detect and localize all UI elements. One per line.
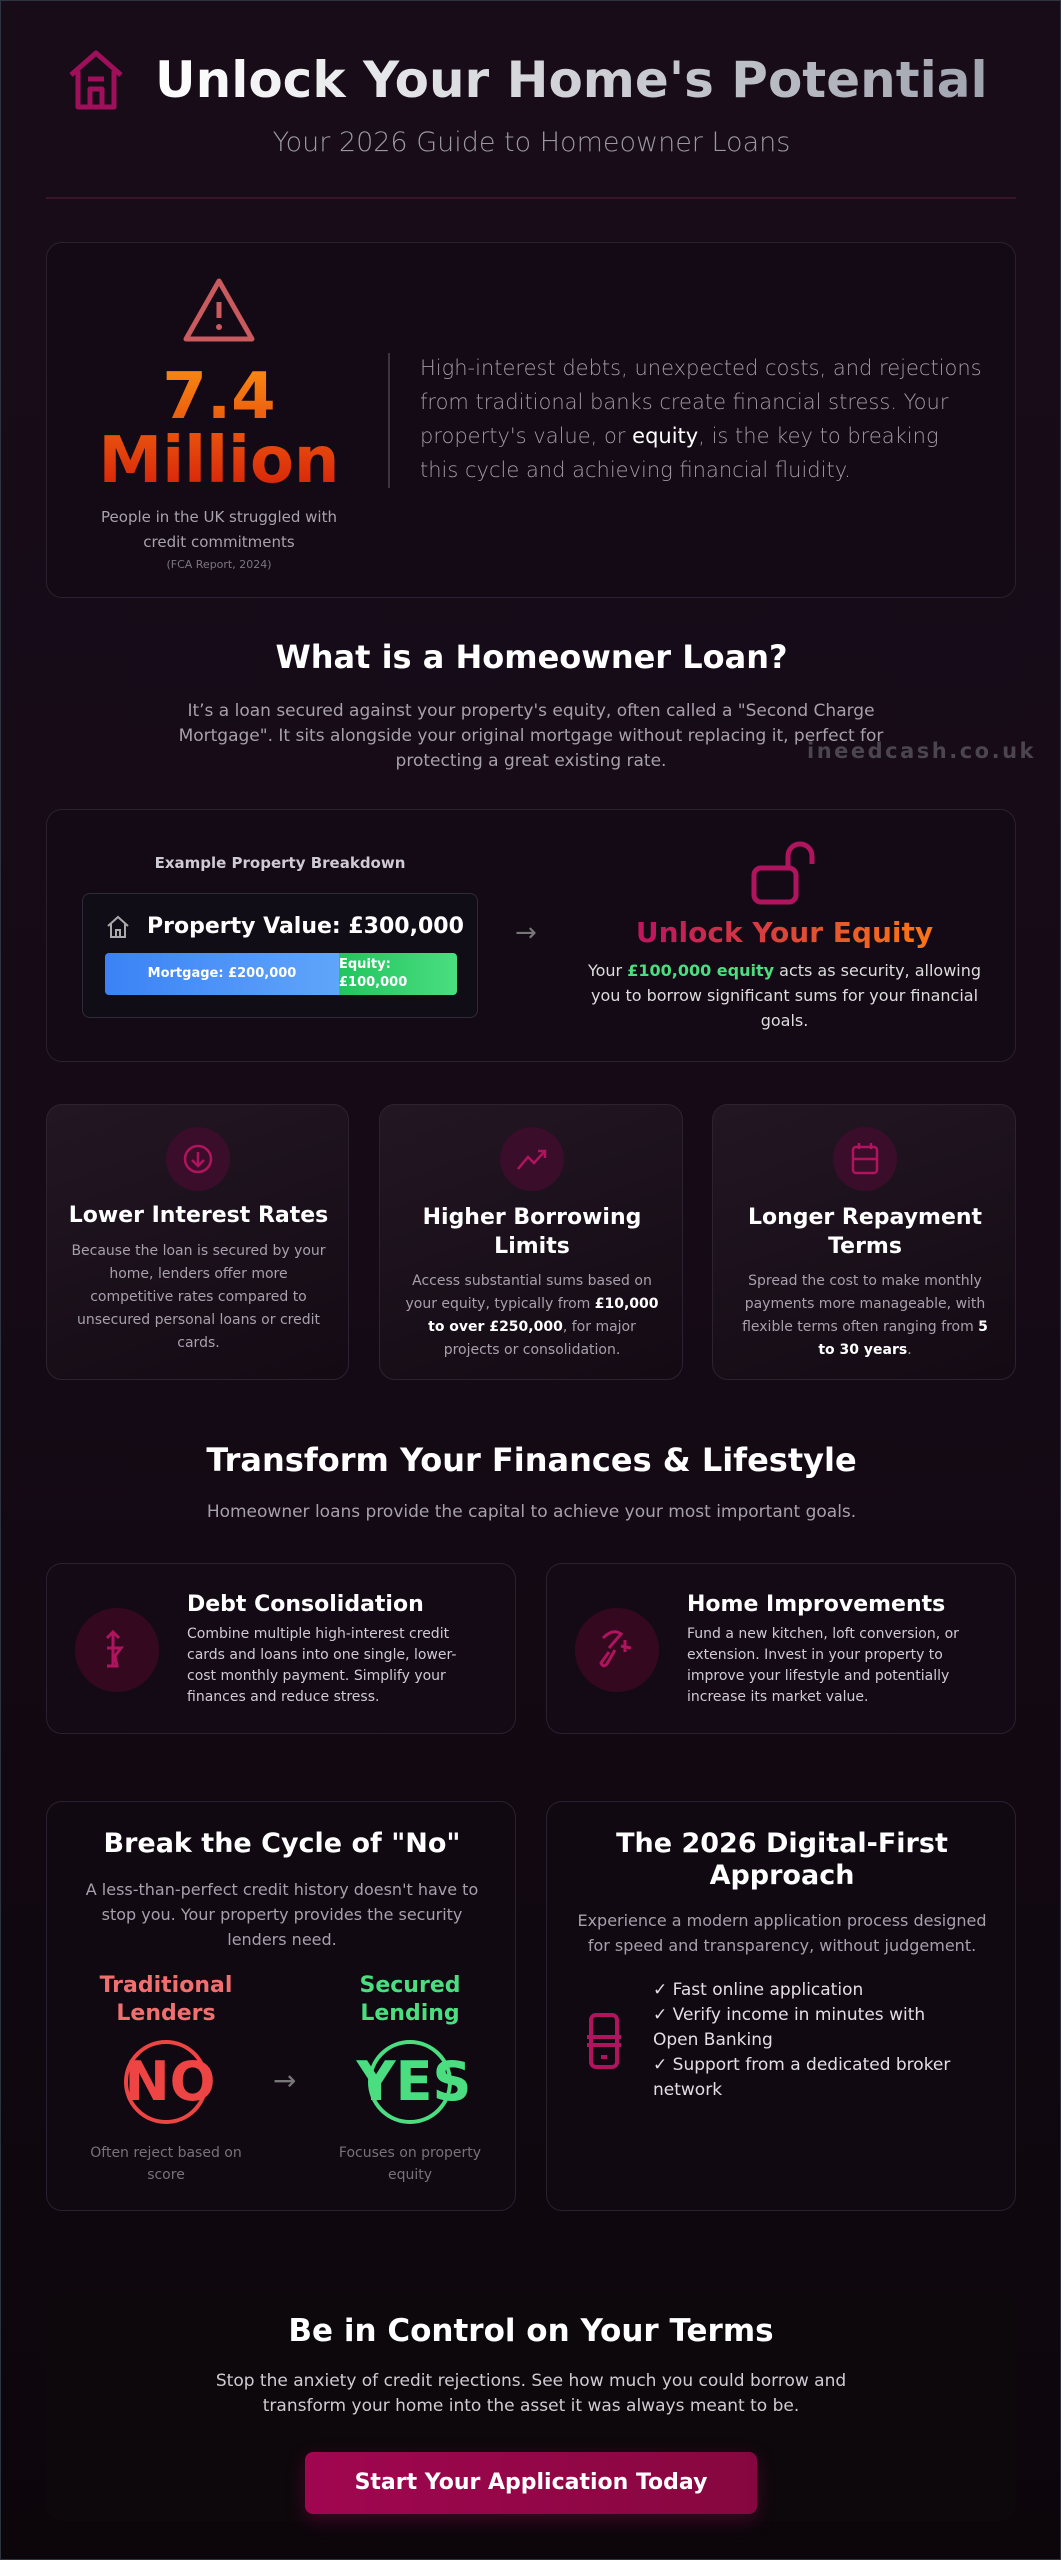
- column: traditional lenders NO: Lenders: [116, 2001, 216, 2026]
- card: lower interest rates: [46, 1104, 349, 1380]
- card: debt consolidation: Combine multiple high-interest credit cards and loans into one single, lower-cost monthly payment. Simplify your finances and reduce stress.: [187, 1626, 456, 1705]
- heading: unlock your equity: [567, 916, 1002, 949]
- bar: mortgage vs equity: Equity:: [339, 957, 391, 972]
- column: traditional lenders NO: [90, 1973, 242, 2183]
- text: definition: It’s a loan secured against your property's equity, often called a "Second Charge Mortgage". It sits alongside your original mortgage without replacing it, perfect for protecting a great existing rate.: [179, 701, 883, 771]
- section: call to action: [46, 2291, 1016, 2521]
- card: home improvements: [546, 1563, 1016, 1734]
- column: secured lending YES: [339, 1973, 481, 2183]
- text: problem description: High-interest debts, unexpected costs, and rejections from traditional banks create financial stress. Your property's value, or equity, is the key to breaking this cycle and achieving financial fluidity.: [420, 356, 982, 482]
- header icon: house: [69, 50, 123, 110]
- icon: tools: [575, 1608, 659, 1692]
- title: Unlock Your Home's Potential: [155, 51, 988, 109]
- card: debt consolidation: [46, 1563, 516, 1734]
- icon: warning: [184, 278, 254, 342]
- heading: what is a homeowner loan: What is a Homeowner Loan?: [275, 638, 788, 676]
- box: property value: Property Value: £300,000: [147, 914, 464, 939]
- icon: phone: [587, 2013, 621, 2069]
- panel: break the cycle of no: A less-than-perfect credit history doesn't have to stop you. Your property provides the security lenders need.: [86, 1880, 478, 1949]
- column: traditional lenders NO: Traditional: [100, 1973, 232, 1998]
- panel: break the cycle of no: [46, 1801, 516, 2211]
- card: longer repayment terms: Spread the cost to make monthly payments more manageable, with flexible terms often ranging from 5 to 30 years.: [742, 1273, 988, 1358]
- column: traditional lenders NO: Often reject based on score: [90, 2145, 242, 2183]
- stat caption: People in the UK struggled with credit commitments: [101, 508, 337, 551]
- stat: 7.4 Million: 7.4: [162, 360, 276, 434]
- stat: 7.4 Million: [67, 365, 371, 493]
- panel: break the cycle of no: Break the Cycle of "No": [104, 1828, 460, 1859]
- stat: 7.4 Million: Million: [99, 424, 339, 498]
- card: longer repayment terms: Longer Repayment: [748, 1205, 982, 1230]
- checklist: [653, 1980, 950, 2100]
- column: traditional lenders NO: NO: [124, 2050, 216, 2113]
- panel: property breakdown: [46, 809, 1016, 1062]
- heading: unlock your equity: Unlock Your Equity: [636, 916, 933, 949]
- bar: mortgage vs equity: [105, 953, 457, 995]
- bar: mortgage vs equity: Mortgage: £200,000: [148, 966, 296, 981]
- icon: trend up: [500, 1127, 564, 1191]
- panel: digital-first approach: [546, 1801, 1016, 2211]
- column: secured lending YES: YES: [357, 2050, 471, 2113]
- checklist: ✓ Support from a dedicated broker network: [653, 2055, 950, 2100]
- stat caption: [101, 508, 337, 571]
- watermark: ineedcash.co.uk: [807, 739, 1036, 763]
- card: longer repayment terms: [712, 1104, 1016, 1380]
- bar: mortgage vs equity: £100,000: [339, 975, 407, 990]
- panel: stress statistic: [46, 242, 1016, 598]
- label: Example Property Breakdown: [155, 854, 405, 872]
- column: secured lending YES: Focuses on property equity: [339, 2145, 481, 2183]
- card: debt consolidation: Debt Consolidation: [187, 1592, 424, 1617]
- arrow: →: [273, 2064, 296, 2097]
- column: secured lending YES: Secured: [360, 1973, 460, 1998]
- arrow: →: [515, 918, 537, 948]
- button: [305, 2452, 757, 2514]
- stat caption: (FCA Report, 2024): [166, 558, 272, 571]
- icon: house small: [107, 916, 129, 938]
- icon: unlocked padlock: [752, 842, 814, 904]
- column: secured lending YES: Lending: [360, 2001, 460, 2026]
- button: Start Your Application Today: [355, 2470, 707, 2495]
- card: higher borrowing limits: Access substantial sums based on your equity, typically from £10,000 to over £250,000, for major projects or consolidation.: [405, 1273, 658, 1358]
- section: call to action: Be in Control on Your Terms: [288, 2313, 774, 2349]
- card: home improvements: Home Improvements: [687, 1592, 945, 1617]
- card: higher borrowing limits: Limits: [494, 1234, 570, 1259]
- panel: digital-first approach: The 2026 Digital-First: [616, 1828, 948, 1859]
- panel: digital-first approach: Experience a modern application process designed for speed and transparency, without judgement.: [577, 1911, 987, 1955]
- text: equity description: Your £100,000 equity acts as security, allowing you to borrow significant sums for your financial goals.: [588, 961, 981, 1030]
- icon: calendar: [833, 1127, 897, 1191]
- checklist: ✓ Verify income in minutes with Open Banking: [653, 2005, 925, 2050]
- subtitle: Your 2026 Guide to Homeowner Loans: [273, 127, 790, 158]
- panel: digital-first approach: Approach: [710, 1860, 854, 1891]
- checklist: ✓ Fast online application: [653, 1980, 863, 2000]
- card: higher borrowing limits: Higher Borrowing: [423, 1205, 641, 1230]
- heading: transform your finances: Transform Your Finances & Lifestyle: [206, 1441, 857, 1479]
- card: higher borrowing limits: [379, 1104, 683, 1380]
- card: longer repayment terms: Terms: [828, 1234, 902, 1259]
- card: lower interest rates: Lower Interest Rates: [69, 1203, 328, 1228]
- icon: merge arrows: [75, 1608, 159, 1692]
- subtitle: Homeowner loans provide the capital to achieve your most important goals.: [207, 1502, 856, 1522]
- section: call to action: Stop the anxiety of credit rejections. See how much you could borrow and transform your home into the asset it was always meant to be.: [216, 2371, 846, 2416]
- card: home improvements: Fund a new kitchen, loft conversion, or extension. Invest in your property to improve your lifestyle and potentially increase its market value.: [687, 1626, 959, 1705]
- card: lower interest rates: Because the loan is secured by your home, lenders offer more competitive rates compared to unsecured personal loans or credit cards.: [71, 1243, 326, 1351]
- box: property value: [82, 893, 478, 1018]
- icon: down arrow circle: [166, 1127, 230, 1191]
